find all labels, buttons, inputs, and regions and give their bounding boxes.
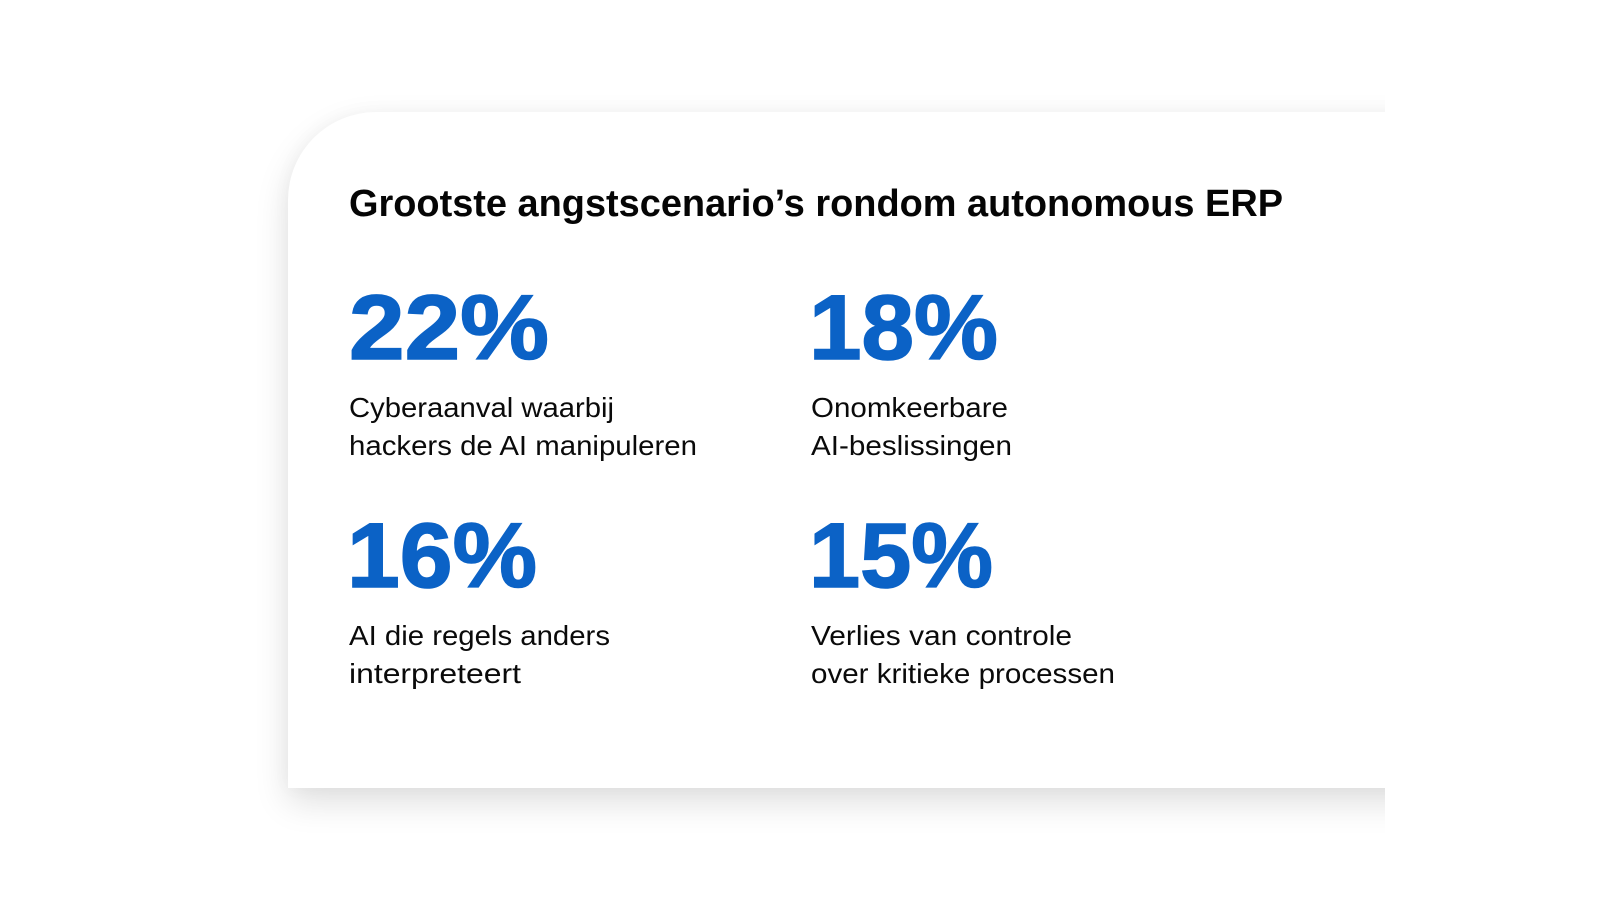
- description: onomkeerbare beslissingen: Onomkeerbare: [811, 392, 1008, 423]
- description: cyberaanval: Cyberaanval waarbij: [349, 392, 614, 423]
- description: onomkeerbare beslissingen: [811, 392, 1012, 461]
- description: regels anders: AI die regels anders: [349, 620, 610, 651]
- stat: 22% cyberaanval: [349, 277, 697, 461]
- description: verlies van controle: Verlies van controle: [811, 620, 1072, 651]
- description: onomkeerbare beslissingen: AI-beslissingen: [811, 430, 1012, 461]
- description: regels anders: [349, 620, 610, 689]
- description: cyberaanval: [349, 392, 697, 461]
- number: 22%: 22%: [349, 277, 549, 379]
- number: 15%: 15%: [809, 505, 993, 607]
- description: verlies van controle: [811, 620, 1115, 689]
- title: Grootste angstscenario’s rondom autonomous ERP: [349, 183, 1283, 225]
- number: 18%: 18%: [809, 277, 998, 379]
- number: 16%: 16%: [347, 505, 537, 607]
- stat: 15% verlies van controle: [809, 505, 1115, 689]
- description: cyberaanval: hackers de AI manipuleren: [349, 430, 697, 461]
- stat: 16% regels anders: [347, 505, 610, 689]
- description: verlies van controle: over kritieke processen: [811, 658, 1115, 689]
- stat: 18% onomkeerbare beslissingen: [809, 277, 1012, 461]
- description: regels anders: interpreteert: [349, 658, 521, 689]
